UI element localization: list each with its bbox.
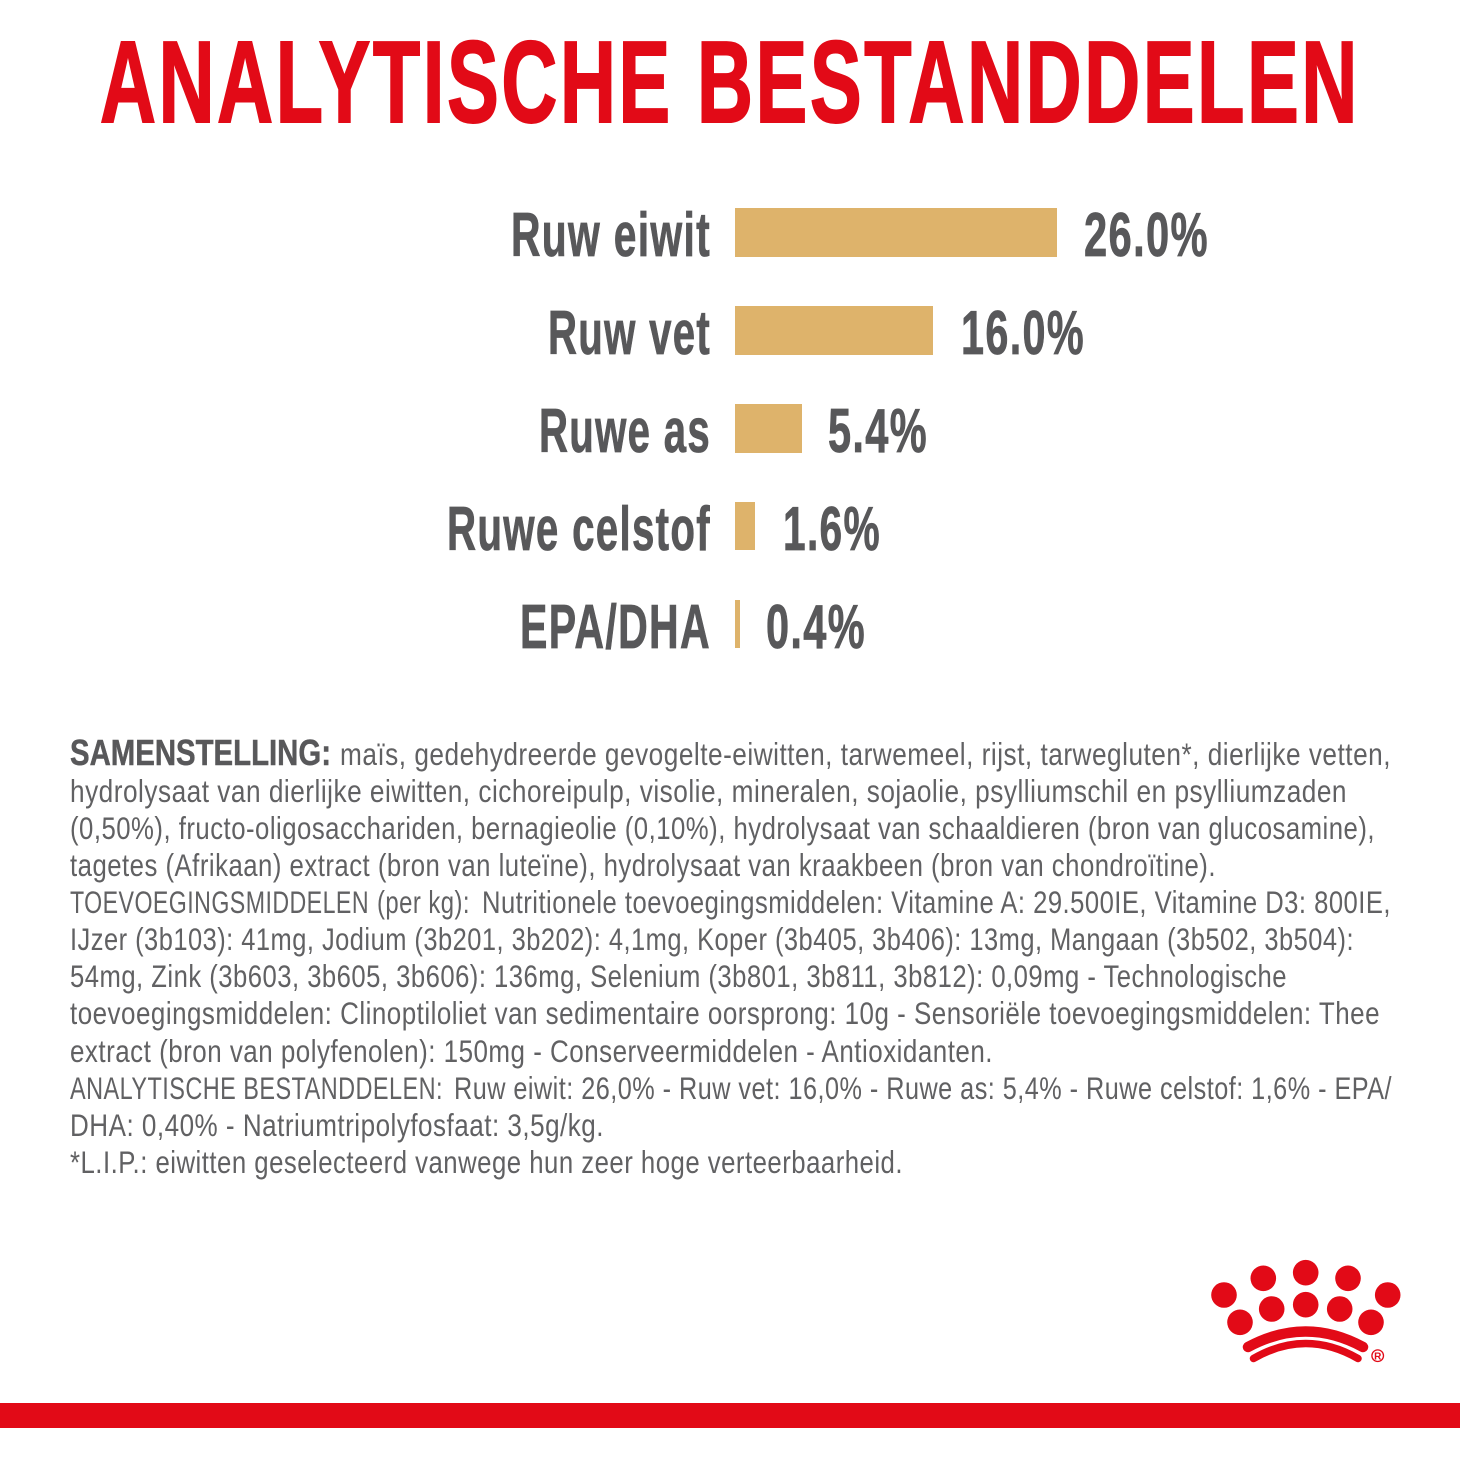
row: Ruw eiwit: Ruw eiwit [511, 201, 711, 270]
composition text block: extract (bron van polyfenolen): 150mg - Conserveermiddelen - Antioxidanten. [70, 1033, 993, 1069]
row: EPA/DHA: EPA/DHA [520, 593, 711, 662]
row: Ruwe as [539, 397, 928, 466]
icon: crown logo [1211, 1260, 1400, 1362]
composition text block: (per kg): [377, 884, 470, 920]
composition text block: SAMENSTELLING: [70, 732, 331, 773]
bar chart [447, 201, 1209, 662]
composition text block: DHA: 0,40% - Natriumtripolyfosfaat: 3,5g/kg. [70, 1107, 604, 1143]
row: Ruw vet: Ruw vet [548, 299, 711, 368]
row: Ruw vet [548, 299, 1085, 368]
composition text block: tagetes (Afrikaan) extract (bron van luteïne), hydrolysaat van kraakbeen (bron van chondroïtine). [70, 847, 1216, 883]
row: Ruwe celstof: Ruwe celstof [447, 495, 711, 564]
bottom red band [0, 1403, 1460, 1428]
row: Ruwe as: 5.4% [828, 397, 928, 466]
row: Ruw eiwit: 26.0% [1084, 201, 1209, 270]
icon: crown logo: R [1374, 1352, 1382, 1362]
row: EPA/DHA: 0.4% [766, 593, 866, 662]
composition text block [70, 732, 1392, 1180]
row: Ruwe as: Ruwe as [539, 397, 711, 466]
row: Ruw vet: 16.0% [961, 299, 1085, 368]
composition text block: TOEVOEGINGSMIDDELEN [70, 884, 369, 920]
composition text block: *L.I.P.: eiwitten geselecteerd vanwege hun zeer hoge verteerbaarheid. [70, 1144, 903, 1180]
row: Ruwe celstof: 1.6% [783, 495, 881, 564]
composition text block: ANALYTISCHE BESTANDDELEN: [70, 1070, 443, 1106]
row: Ruw eiwit [511, 201, 1209, 270]
